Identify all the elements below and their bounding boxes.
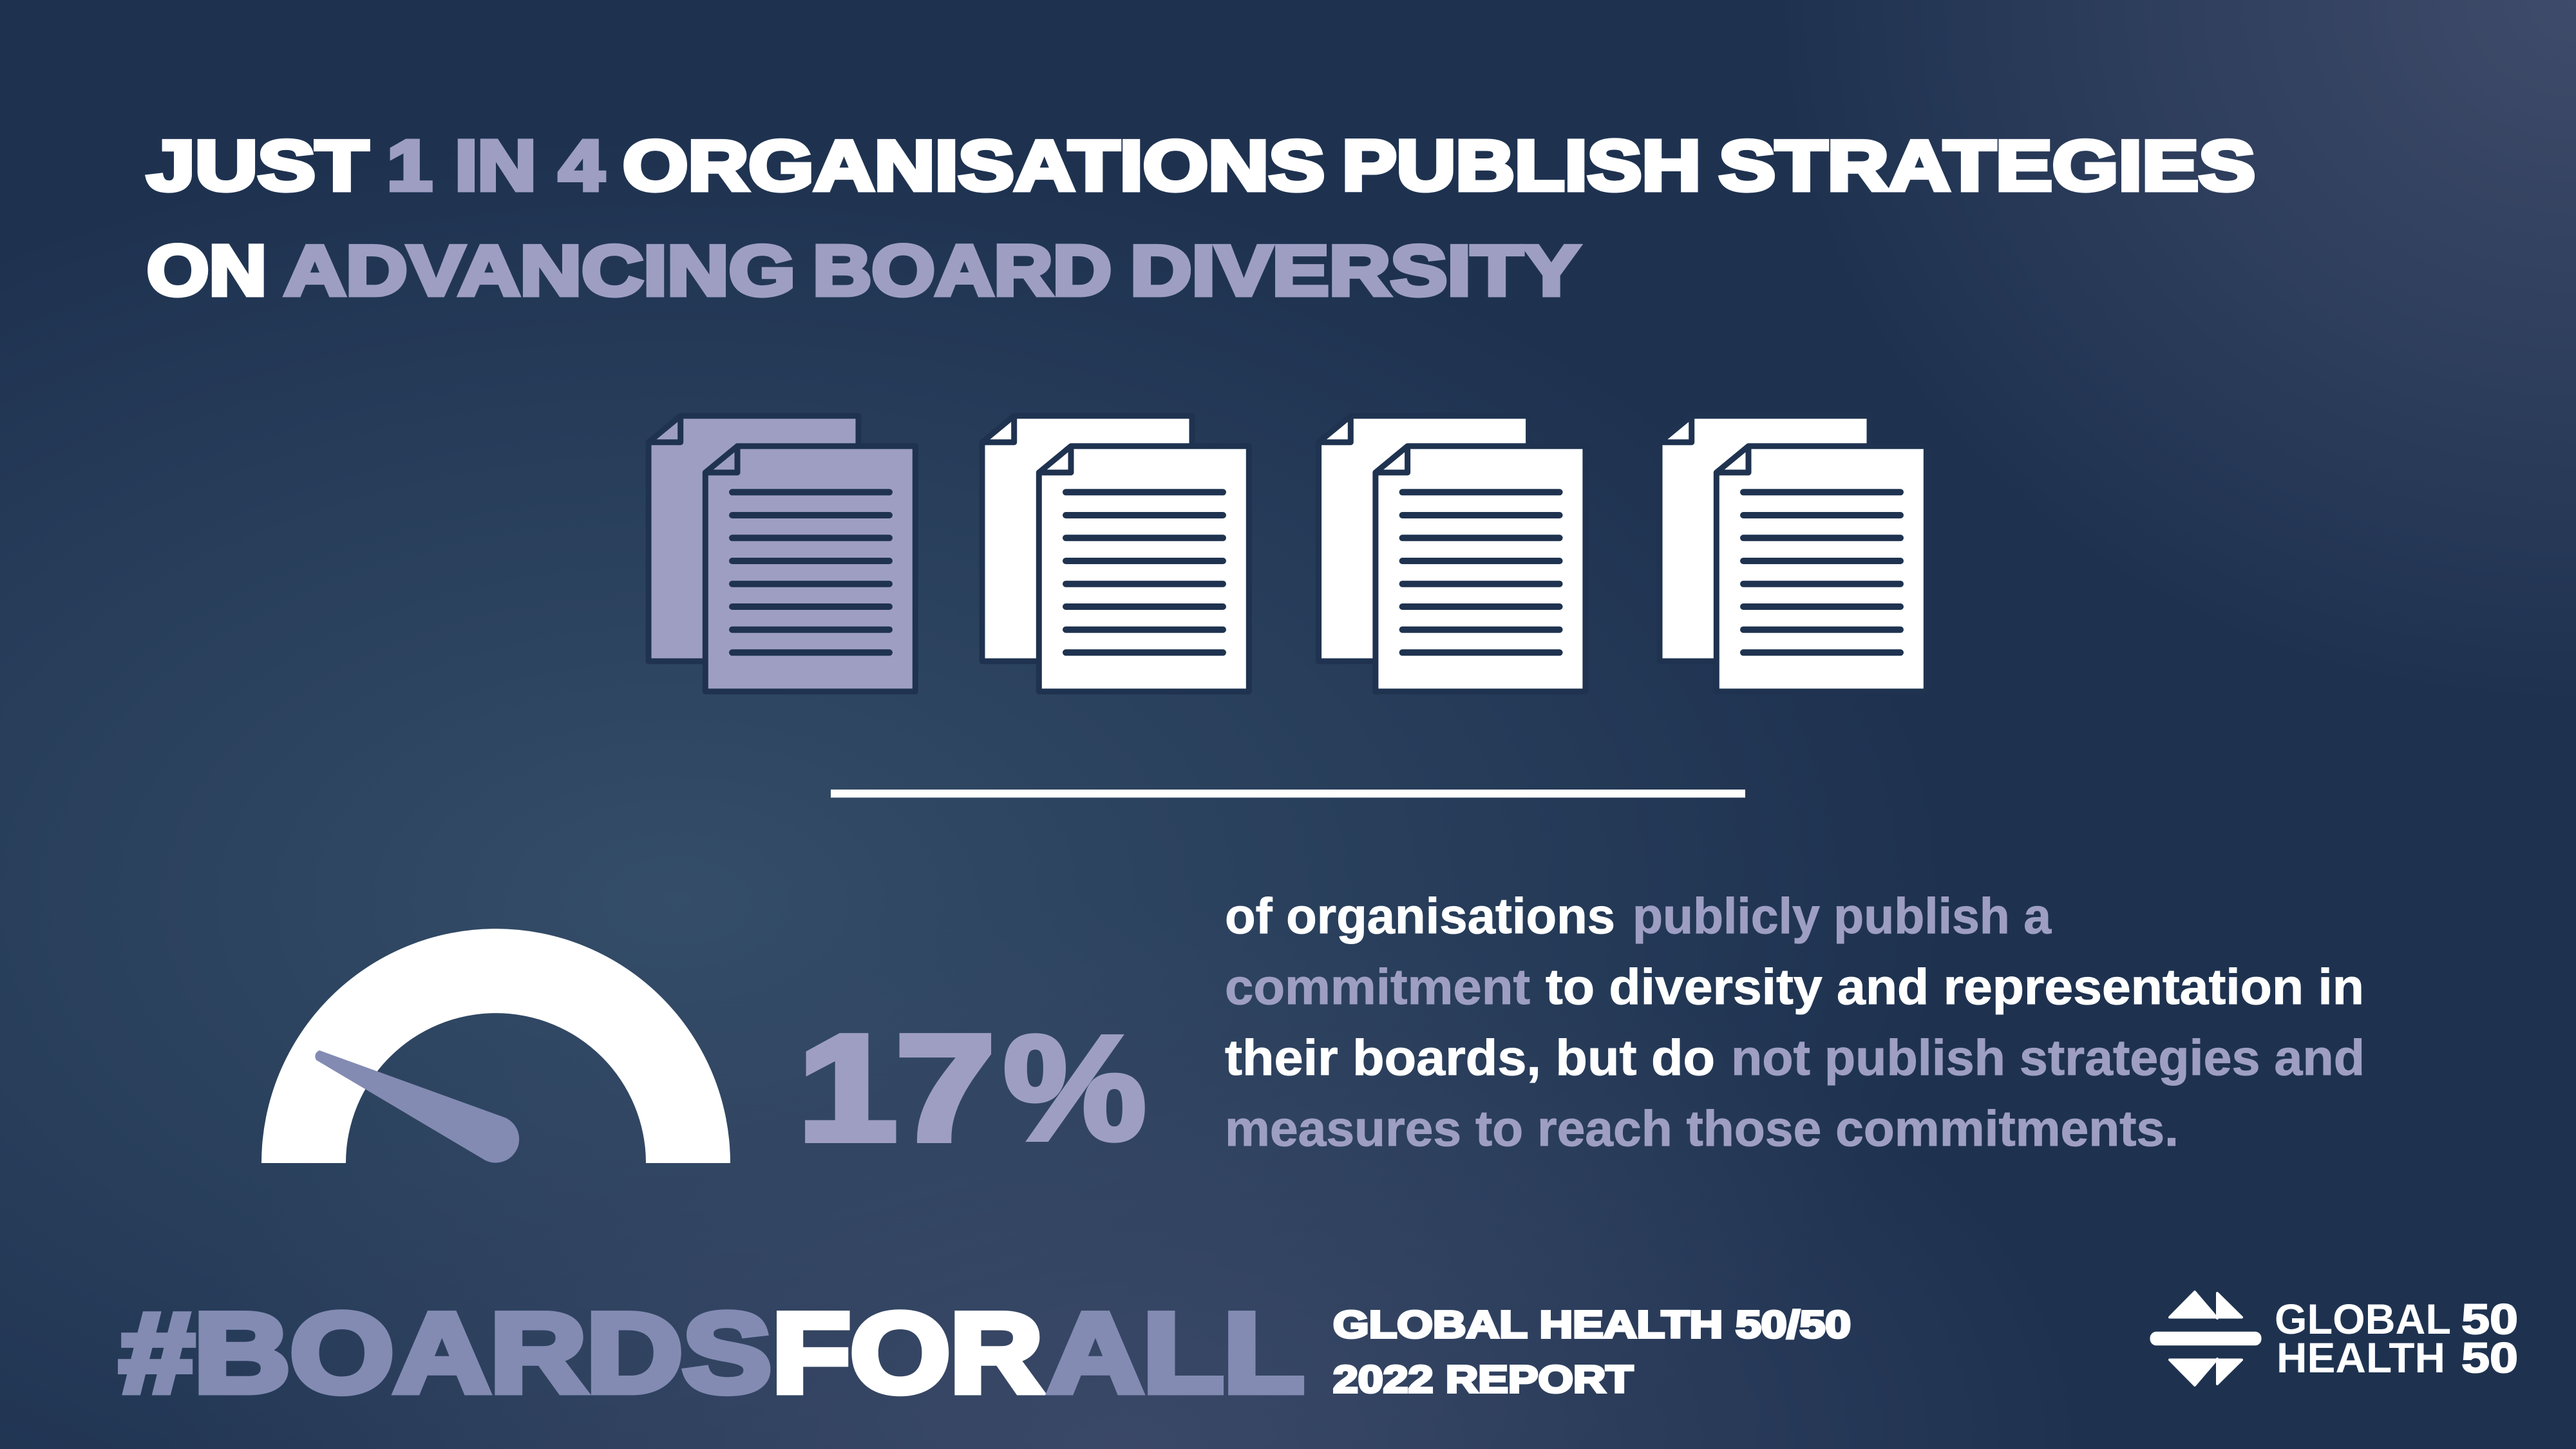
report label: 2022 REPORT — [1333, 1358, 1633, 1401]
hashtag: #BOARDSFORALL — [120, 1291, 1304, 1416]
description text: commitment — [1225, 958, 1530, 1015]
description text: their boards, but do — [1225, 1029, 1715, 1086]
icon: white document stack (4 of 4) — [1660, 416, 1926, 692]
logo wordmark: HEALTH — [2277, 1334, 2445, 1381]
title: ADVANCING — [284, 231, 795, 310]
gauge chart — [261, 929, 730, 1163]
title: DIVERSITY — [1130, 231, 1580, 310]
description text — [1225, 887, 2365, 1157]
title — [147, 126, 2255, 310]
hashtag: #BOARDSFORALL: #BOARDS — [120, 1291, 772, 1416]
stat: 17%: % — [1003, 1005, 1146, 1171]
description text: to diversity and representation in — [1546, 958, 2364, 1015]
report label: GLOBAL HEALTH 50/50 — [1333, 1303, 1851, 1346]
logo wordmark — [2275, 1295, 2518, 1381]
title: STRATEGIES — [1719, 126, 2255, 205]
logo wordmark: 50 — [2461, 1334, 2518, 1381]
stat: 17%: 17 — [799, 1005, 994, 1171]
hashtag: #BOARDSFORALL: ALL — [1048, 1291, 1304, 1416]
description text: publicly publish a — [1633, 887, 2052, 944]
logo: Global Health 50/50 — [2151, 1292, 2518, 1385]
description text: measures to reach those commitments. — [1225, 1100, 2179, 1157]
title: BOARD — [813, 231, 1112, 310]
report label — [1333, 1303, 1851, 1401]
title: JUST — [147, 126, 368, 205]
icon: white document stack (3 of 4) — [1319, 416, 1586, 692]
gauge needle — [315, 1050, 519, 1163]
hashtag: #BOARDSFORALL: FOR — [772, 1291, 1043, 1416]
logo wordmark: GLOBAL — [2275, 1295, 2451, 1343]
title: ON — [147, 231, 267, 310]
stat: 17% — [799, 1005, 1146, 1171]
title: PUBLISH — [1342, 126, 1701, 205]
icon: white document stack (2 of 4) — [982, 416, 1249, 692]
icon: highlighted document stack (1 of 4) — [649, 416, 915, 692]
description text: not publish strategies and — [1731, 1029, 2365, 1086]
logo wordmark: 50 — [2461, 1295, 2518, 1343]
title: ORGANISATIONS — [623, 126, 1325, 205]
description text: of organisations — [1225, 887, 1615, 944]
logo mark — [2151, 1292, 2260, 1385]
gauge arc — [261, 929, 730, 1163]
title: 1 IN 4 — [387, 126, 604, 205]
